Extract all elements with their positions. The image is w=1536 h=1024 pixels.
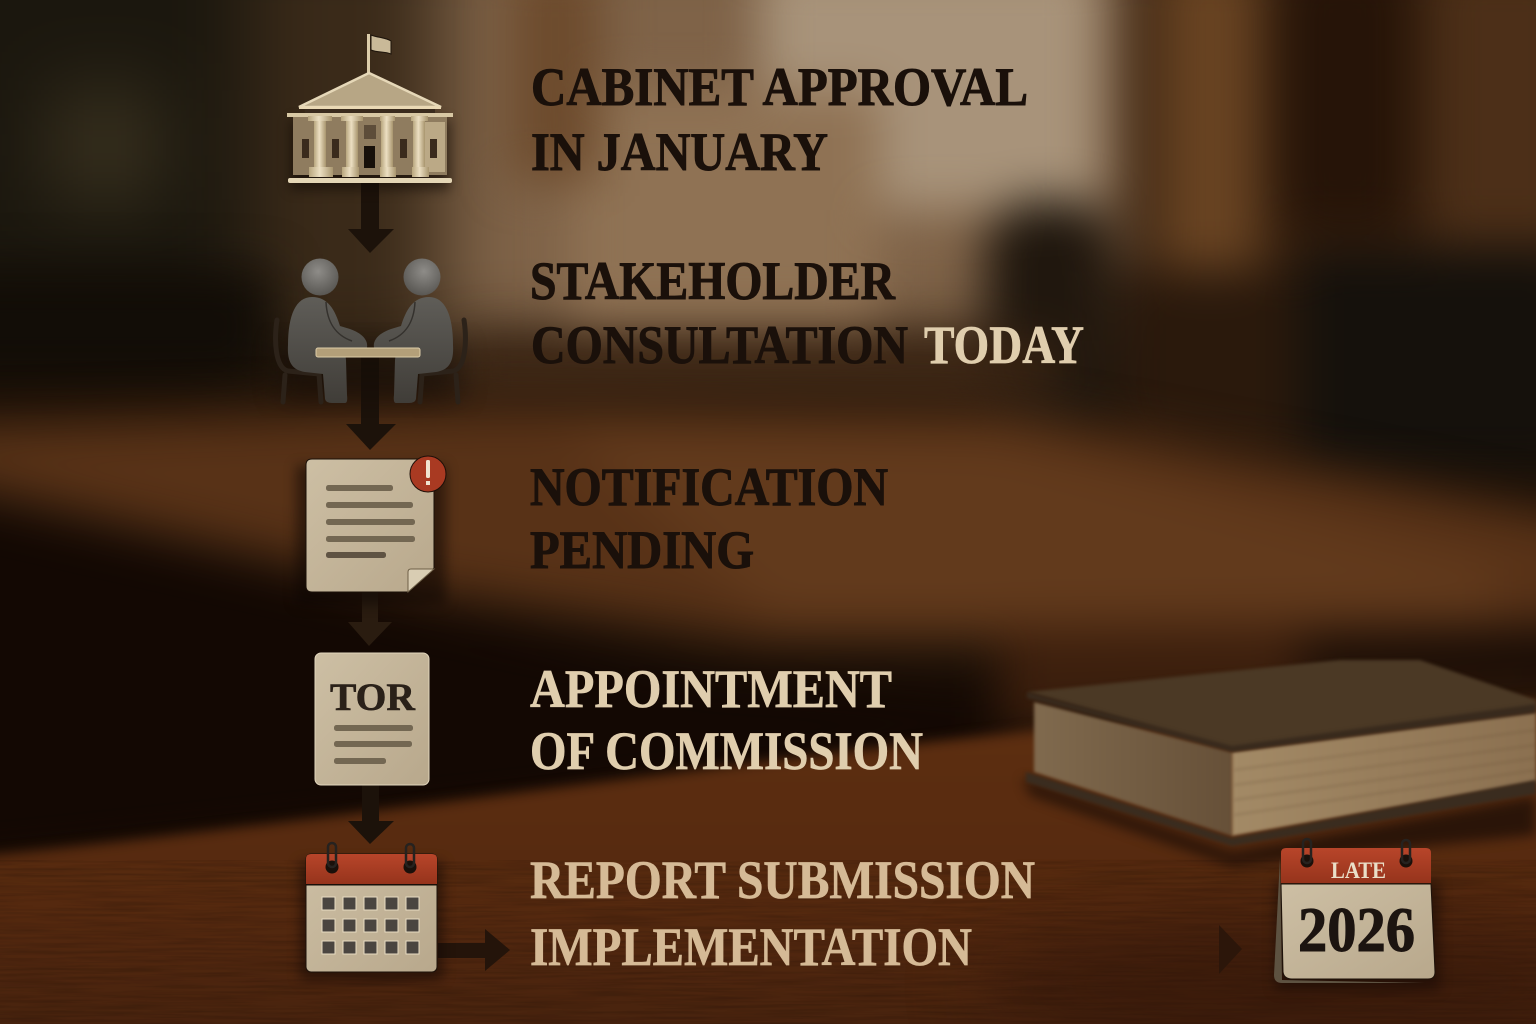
icon: late 2026 calendar [1274,839,1440,990]
arrow: implementation to late 2026 [1219,925,1242,974]
alert badge [410,456,446,492]
icon: government building [287,34,453,190]
step 5 text: report submission implementation: IMPLEMENTATION [530,917,972,977]
arrow: TOR to calendar [348,785,394,844]
step 2 text: stakeholder consultation today: TODAY [924,315,1084,375]
icon: late 2026 calendar: 2026 [1298,895,1415,965]
step 1 text: cabinet approval: IN JANUARY [531,122,828,182]
arrows between steps [346,183,1242,974]
wooden desk foreground [0,700,1536,1024]
step 4 text: appointment of commission [530,659,923,781]
step 1 text: cabinet approval [531,57,1028,182]
icon: TOR document [315,653,429,785]
step 3 text: notification pending [530,457,888,580]
step 1 text: cabinet approval: CABINET APPROVAL [531,57,1028,117]
arrow: cabinet to consultation [348,183,394,253]
step 3 text: notification pending: PENDING [530,520,754,580]
book on desk [1022,660,1536,866]
arrow: consultation to notification [346,357,396,450]
step 2 text: stakeholder consultation today: STAKEHOLDER [530,251,896,311]
icon: notification document with alert [296,456,446,605]
icon: late 2026 calendar: LATE [1331,858,1386,883]
step 4 text: appointment of commission: APPOINTMENT [530,659,892,719]
icon: TOR document: TOR [330,676,416,719]
step 4 text: appointment of commission: OF COMMISSION [530,721,923,781]
step 5 text: report submission implementation [530,850,1035,977]
arrow: notification to TOR [348,592,392,646]
icon: calendar with grid [300,843,443,980]
step 2 text: stakeholder consultation today [530,251,1084,375]
step 2 text: stakeholder consultation today: CONSULTATION [531,315,908,375]
step 5 text: report submission implementation: REPORT SUBMISSION [530,850,1035,910]
icon: two people at a table [276,258,465,403]
step 3 text: notification pending: NOTIFICATION [530,457,888,517]
arrow: calendar to report text [438,929,510,971]
